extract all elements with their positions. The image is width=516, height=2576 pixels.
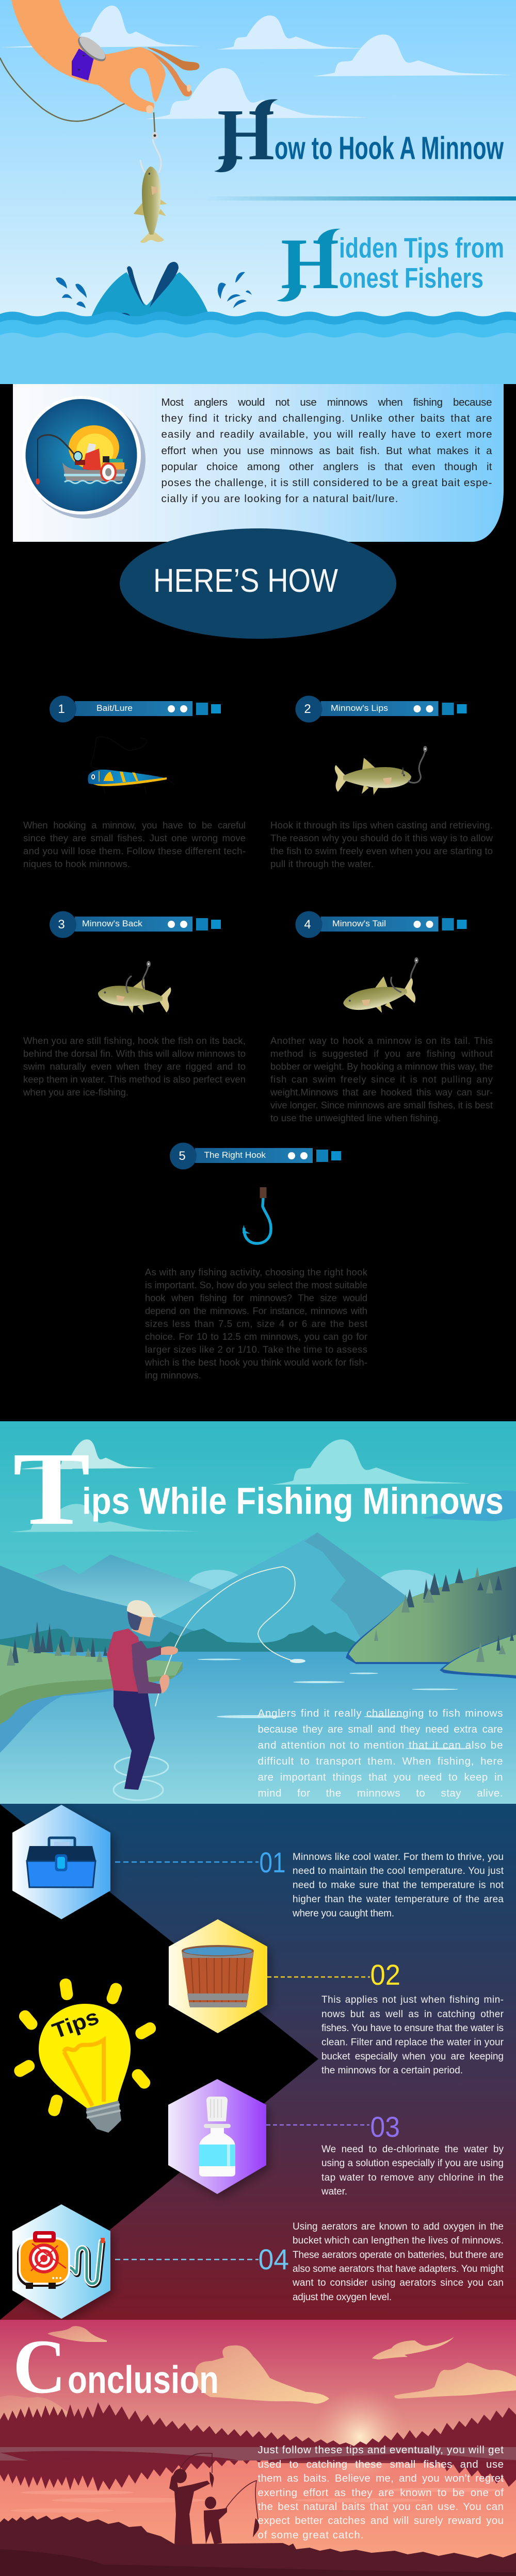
icon: light bulb with Tips: Tips	[49, 2004, 102, 2043]
hexagon: bottle	[168, 2079, 266, 2194]
text block: step 4: weight.Minnows that are hooked this way can sur-	[270, 1087, 493, 1098]
subtitle: Hidden Tips from Honest Fishers: H	[281, 224, 339, 304]
text block: step 4: method is suggested if you are fishing without	[270, 1048, 493, 1059]
title: Tips While Fishing Minnows	[13, 1431, 504, 1547]
text block: need to make sure that the temperature is not	[293, 1880, 504, 1891]
text block: bucket especially when you are keeping	[321, 2051, 504, 2062]
text block: expect better catches and will surely reward you	[258, 2515, 504, 2527]
text block: step 5: sizes less than 7.5 cm, size 4 or 6 are the best	[145, 1318, 367, 1329]
step 4 banner: Minnow's Tail: 4	[304, 918, 311, 932]
hexagon: bucket	[169, 1919, 267, 2033]
anglers silhouettes	[169, 2469, 259, 2545]
title: Conclusion: onclusion	[68, 2358, 219, 2401]
text block: step 1: and you will lose them. Follow these different tech-	[23, 845, 246, 856]
connector	[266, 2124, 369, 2125]
icon: lure	[88, 737, 174, 793]
text block: of some great catch.	[258, 2529, 363, 2541]
step 3 banner: Minnow's Back: 3	[58, 918, 65, 932]
number: 02	[370, 1958, 400, 1991]
text block: water.	[321, 2186, 347, 2197]
text block: difficult to transport them. When fishing, here	[258, 1755, 503, 1767]
text block: popular choice among other anglers is that even though it	[161, 461, 492, 473]
clouds	[10, 1439, 516, 1532]
text block	[321, 2144, 504, 2197]
text block: the minnows for a certain period.	[321, 2065, 463, 2076]
text block: where you caught them.	[292, 1908, 394, 1919]
text block: Most anglers would not use minnows when fishing because	[161, 396, 492, 408]
right hills	[346, 1567, 516, 1678]
text block: step 4: fish can swim freely since it is not pulling any	[270, 1074, 493, 1085]
text block: step 5: which is the best hook you think would work for fish-	[144, 1357, 367, 1368]
clouds	[0, 6, 513, 119]
step 4 banner: Minnow's Tail: Minnow's Tail	[332, 919, 386, 928]
fisherman	[107, 1567, 305, 1800]
connector	[267, 1976, 370, 1977]
icon: minnow hooked on lips	[335, 746, 427, 795]
text block: are important things that you need to keep in	[258, 1771, 503, 1783]
number: 04	[259, 2243, 289, 2275]
text block: step 3: behind the dorsal fin. With this will allow minnows to	[23, 1048, 246, 1059]
item 02	[169, 1919, 504, 2076]
icon: light bulb with Tips	[12, 1978, 158, 2133]
text block: higher than the water temperature of the area	[293, 1894, 504, 1905]
step 5 banner: The Right Hook: The Right Hook	[204, 1150, 266, 1160]
mountains	[0, 1532, 464, 1652]
text block: step 5: ing minnows.	[145, 1370, 201, 1381]
text block: effort when you use minnows as bait fish. But what makes it a	[161, 445, 492, 457]
text block: used to catching these small fishes and use	[258, 2458, 504, 2470]
title: How to Hook A Minnow	[214, 94, 504, 175]
panel: intro	[13, 384, 504, 542]
text block: want to consider using aerators since you can	[292, 2278, 504, 2288]
text block: step 5: depend on the minnows. For instance, minnows with	[145, 1305, 367, 1316]
text block: step 2: pull it through the water.	[270, 858, 374, 869]
text block	[292, 1852, 504, 1919]
hexagon: aerator	[12, 2204, 110, 2319]
step 1 banner: Bait/Lure: 1	[58, 702, 65, 716]
text block: bucket which can lengthen the lives of minnows.	[293, 2235, 504, 2246]
text block: nows but as well as in catching other	[321, 2009, 504, 2020]
text block: step 5: is important. So, how do you select the most suitable	[145, 1279, 367, 1290]
sun glow	[311, 2388, 409, 2486]
text block: step 5: As with any fishing activity, choosing the right hook	[145, 1267, 368, 1277]
fishing rods	[179, 2453, 258, 2520]
text block: fishes. You have to ensure that the water is	[321, 2023, 504, 2034]
text block: step 2: the fish to swim freely even when you are starting to	[270, 845, 493, 856]
text block: them as baits. Believe me, and you won’t regret	[258, 2472, 504, 2484]
step 4 banner: Minnow's Tail	[295, 911, 466, 938]
icon: minnow hooked on back	[97, 961, 172, 1016]
foreground land	[0, 2516, 516, 2576]
text block: step 4: Another way to hook a minnow is on its tail. This	[270, 1035, 493, 1046]
text block: step 4: bobber or weight. By hooking a minnow this way, the	[270, 1061, 493, 1072]
text block: step 1: niques to hook minnows.	[23, 858, 130, 869]
text block: using a solution especially if you are using	[321, 2158, 504, 2169]
text block: step 4: vive longer. Since minnows are small fishes, it is best	[270, 1100, 493, 1110]
tree reflection	[0, 2447, 516, 2492]
text block: step 2: Hook it through its lips when casting and retrieving.	[270, 820, 493, 830]
text block: step 1: since they are small fishes. Just one wrong move	[23, 833, 246, 843]
icon: hook with minnow	[134, 112, 167, 243]
text block: step 5: hook when fishing for minnows? The size would	[145, 1292, 367, 1303]
text block: tap water to remove any chlorine in the	[321, 2172, 504, 2183]
text block: step 2: The reason why you should do it this way is to allow	[270, 833, 493, 843]
text block: the best natural baits that you can use. You can	[258, 2501, 504, 2513]
text block: exerting effort as they are known to be one of	[258, 2487, 504, 2499]
text block: because they are small and they need extra care	[258, 1723, 503, 1735]
icon: water splashes	[56, 272, 252, 308]
text block	[161, 396, 492, 505]
text block: step 5: choice. For 10 to 12.5 cm minnows, you can go for	[145, 1331, 367, 1342]
text block: cially if you are looking for a natural bait/lure.	[161, 493, 398, 505]
subtitle: Hidden Tips from Honest Fishers	[277, 224, 504, 304]
text block: Minnows like cool water. For them to thrive, you	[293, 1852, 504, 1863]
item 01	[12, 1805, 504, 1919]
trees light	[7, 1567, 506, 1666]
icon: tail fin splashing	[90, 262, 212, 324]
text block: We need to de-chlorinate the water by	[321, 2144, 504, 2155]
icon: hand with watch	[11, 0, 200, 113]
title: How to Hook A Minnow: H	[217, 94, 275, 175]
panel: header	[0, 0, 516, 384]
text block: and attention not to mention that it can also be	[258, 1739, 503, 1751]
icon: fishing line	[0, 58, 143, 121]
step 1 banner: Bait/Lure	[50, 696, 221, 723]
text block: they find it tricky and challenging. Unlike other baits that are	[161, 412, 492, 424]
text block	[292, 2221, 504, 2303]
text block: clean. Filter and replace the water in your	[321, 2037, 504, 2048]
clouds	[0, 2326, 516, 2420]
text block: Anglers find it really challenging to fish minows	[258, 1707, 503, 1719]
title: Tips While Fishing Minnows: T	[13, 1431, 90, 1547]
text block: need to maintain the cool temperature. You just	[293, 1866, 504, 1876]
text block: adjust the oxygen level.	[293, 2292, 392, 2303]
icon: boat badge	[22, 396, 146, 519]
text block: step 1: When hooking a minnow, you have to be careful	[23, 820, 246, 830]
text block	[258, 2444, 504, 2541]
text block: step 4	[270, 1035, 493, 1123]
text block: poses the challenge, it is still considered to be a great bait espe-	[161, 477, 492, 489]
text block: Using aerators are known to add oxygen in the	[293, 2221, 504, 2232]
text block: step 1	[23, 820, 246, 869]
left land	[0, 1644, 183, 1753]
divider rule	[204, 196, 516, 201]
text block: easily and readily available, you will really have to exert more	[161, 428, 492, 440]
text block: step 5: larger sizes like 2 or 1/10. Take the time to assess	[145, 1344, 367, 1355]
title: Conclusion: C	[13, 2324, 66, 2409]
text block: mind for the minnows to stay alive.	[258, 1787, 503, 1799]
text block: step 3: swim naturally even when they are rigged and to	[23, 1061, 246, 1072]
icon: minnow hooked on tail	[340, 957, 418, 1020]
tree line	[0, 2402, 516, 2447]
panel: conclusion	[0, 2320, 516, 2576]
step 3 banner: Minnow's Back	[50, 911, 221, 938]
lake shadow band	[0, 2447, 516, 2463]
step 3 banner: Minnow's Back: Minnow's Back	[82, 919, 143, 928]
step 5 banner: The Right Hook	[170, 1142, 341, 1169]
connector	[115, 2259, 259, 2260]
waves	[0, 311, 516, 340]
title: Conclusion	[13, 2324, 219, 2409]
item 03	[168, 2079, 504, 2197]
step 2 banner: Minnow's Lips: Minnow's Lips	[331, 703, 388, 713]
number: 03	[370, 2110, 400, 2143]
text block: Just follow these tips and eventually, you will get	[258, 2444, 504, 2456]
trees	[11, 1568, 514, 1663]
icon: blue hook	[243, 1187, 271, 1243]
text block: step 3: when you are ice-fishing.	[23, 1087, 128, 1098]
step 5 banner: The Right Hook: 5	[179, 1149, 186, 1163]
text block	[321, 1995, 504, 2076]
text block: step 3: keep them in water. This method is also perfect even	[23, 1074, 246, 1085]
water glints	[198, 1659, 472, 1750]
number: 01	[259, 1846, 286, 1879]
panel: tips list	[0, 1804, 516, 2320]
item 04	[12, 2204, 504, 2319]
text block	[258, 1707, 503, 1799]
text block: This applies not just when fishing min-	[321, 1995, 504, 2005]
text block: step 4: to use the unweighted line when fishing.	[270, 1112, 441, 1123]
text block: step 2	[270, 820, 493, 869]
connector	[115, 1862, 259, 1863]
heading: HERE'S HOW	[120, 528, 396, 639]
step 2 banner: Minnow's Lips: 2	[304, 702, 311, 716]
text block: also some aerators that have adapters. You might	[293, 2264, 504, 2274]
hexagon: toolbox	[12, 1805, 110, 1919]
text block: step 3: When you are still fishing, hook the fish on its back,	[23, 1035, 246, 1046]
step 1 banner: Bait/Lure: Bait/Lure	[96, 703, 133, 713]
heading: HERE'S HOW: HERE’S HOW	[153, 562, 338, 599]
panel: tips while fishing minnows	[0, 1421, 516, 1804]
text block: step 3	[23, 1035, 246, 1098]
text block: step 5	[144, 1267, 368, 1381]
water streaks	[10, 2488, 506, 2513]
text block: These aerators operate on batteries, but there are	[293, 2250, 504, 2261]
step 2 banner: Minnow's Lips	[295, 696, 466, 723]
